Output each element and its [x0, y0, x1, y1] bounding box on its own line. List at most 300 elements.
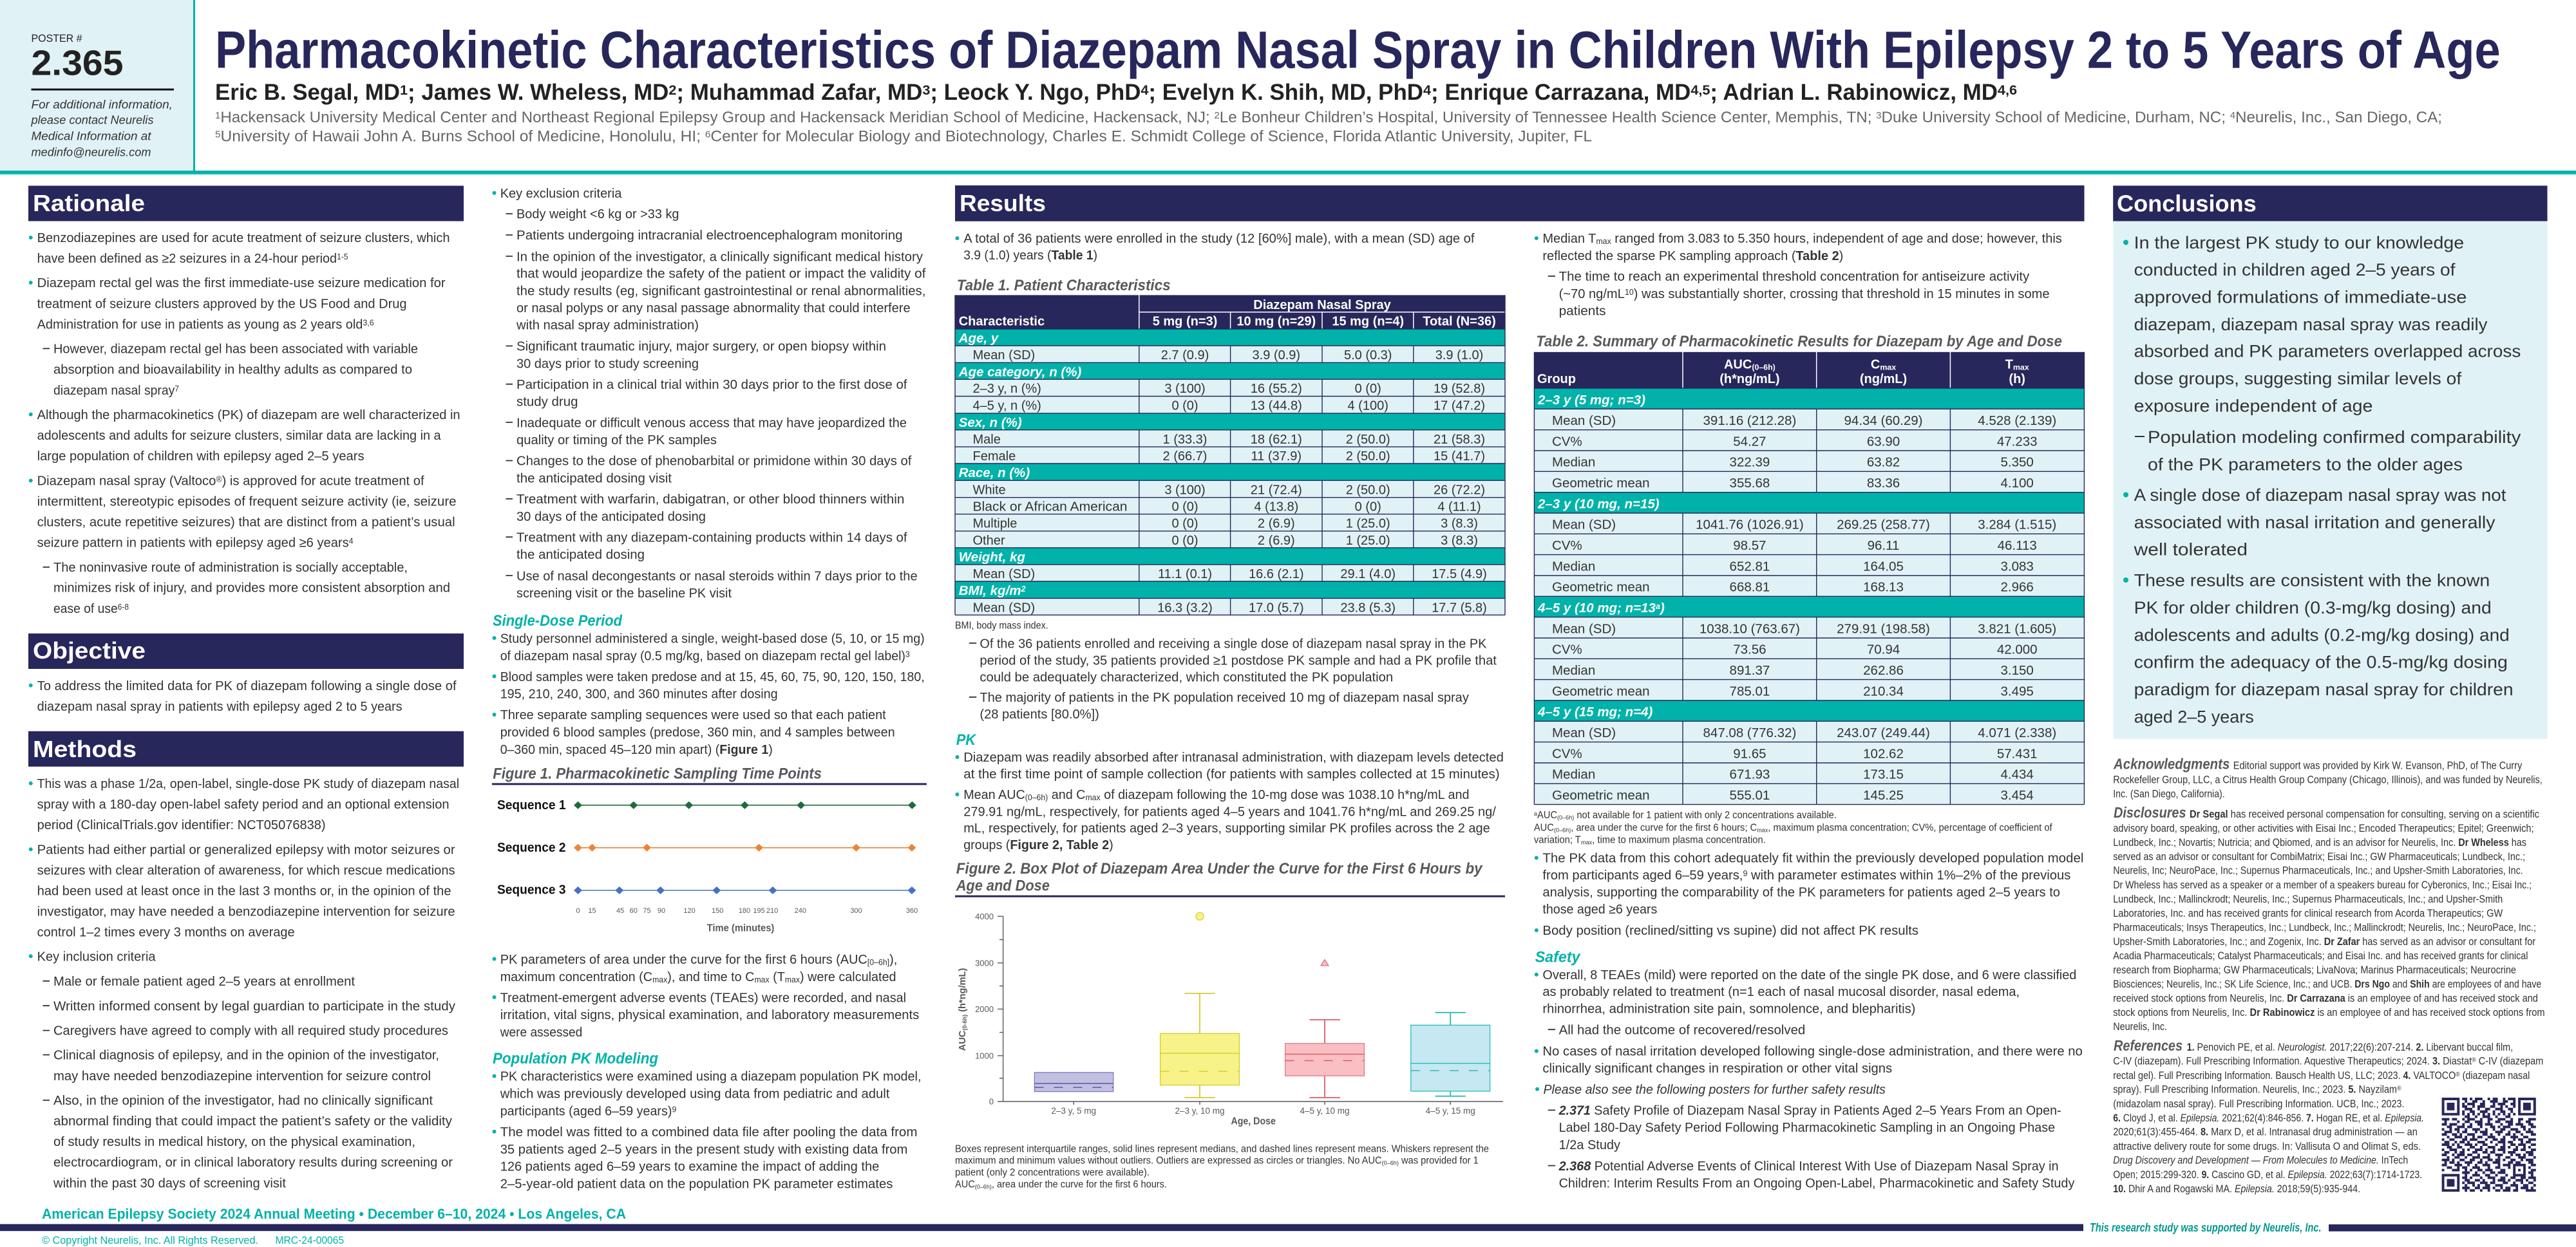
table 1 rows: 0 (0): [1171, 399, 1198, 413]
table 1 rows: 3 (8.3): [1441, 534, 1478, 548]
text block: safety bullets: Please also see the following posters for further safety results: [1543, 1082, 1886, 1097]
table 2 rows: 2.966: [2001, 580, 2034, 595]
text block: safety bullets: All had the outcome of recovered/resolved: [1559, 1022, 1805, 1037]
bullet: diazepam rectal gel: [29, 276, 446, 332]
table 2 rows: CV%: [1552, 434, 1582, 449]
table 2 rows: Mean (SD): [1552, 518, 1616, 532]
table 1 title: Table 1. Patient Characteristics: [957, 277, 1171, 294]
table 1 rows: 17 (47.2): [1434, 399, 1485, 413]
bullet: pharmacokinetics: Although the pharmacokinetics (PK) of diazepam are well characterized in: [37, 408, 460, 422]
bullet: objective text: To address the limited data for PK of diazepam following a single dose of: [37, 679, 457, 693]
bullet: key exclusion criteria: or nasal polyps or any nasal passage abnormality that could interfere: [516, 301, 911, 315]
icon: QR code: [2442, 1098, 2536, 1192]
bullet: largest PK study: absorbed and PK parameters overlapped across: [2134, 342, 2521, 361]
table 2 rows: 168.13: [1863, 580, 1904, 595]
table 1 rows: 1 (33.3): [1163, 433, 1207, 447]
table 2 footnotes: AUC(0–6h), area under the curve for the first 6 hours; Cmax, maximum plasma concentration; CV%, percentage of coefficient of: [1534, 823, 2052, 834]
bullet: key exclusion criteria: study drug: [516, 395, 578, 409]
text block: population PK bullets: 126 patients aged 6–59 years to examine the impact of adding the: [500, 1159, 879, 1174]
table 1 section labels: Weight, kg: [959, 550, 1025, 565]
figure 2 caption: maximum and minimum values without outliers. Outliers are expressed as circles or triangles. No AUC(0–6h) was provided for 1: [955, 1156, 1479, 1167]
bullet: results consistent: paradigm for diazepam nasal spray for children: [2134, 680, 2514, 699]
table 2 rows: Mean (SD): [1552, 726, 1616, 740]
references: Open; 2015:299-320. 9. Cascino GD, et al. Epilepsia. 2022;63(7):1714-1723.: [2113, 1169, 2422, 1181]
bullet: benzodiazepines: have been defined as ≥2 seizures in a 24-hour period1-5: [37, 251, 348, 266]
table 1 rows: 16 (55.2): [1251, 382, 1302, 396]
text block: safety bullets: No cases of nasal irritation developed following single-dose administration, and there were no: [1542, 1044, 2083, 1059]
bullet: key inclusion criteria: Caregivers have agreed to comply with all required study procedures: [53, 1024, 448, 1038]
y axis labels: 2000: [975, 1004, 994, 1014]
table 2 rows: 652.81: [1730, 559, 1770, 574]
table 2 title: Table 2. Summary of Pharmacokinetic Results for Diazepam by Age and Dose: [1536, 333, 2062, 350]
table 2 header: Tmax: [2005, 358, 2029, 372]
table 1 rows: 17.0 (5.7): [1249, 601, 1304, 615]
bullet: key inclusion criteria: [29, 949, 456, 1190]
table 2 rows: 63.82: [1867, 455, 1900, 470]
bullet: objective text: diazepam nasal spray in patients with epilepsy aged 2 to 5 years: [37, 699, 402, 714]
panel: conclusions: [2113, 185, 2548, 739]
table 2 rows: 70.94: [1867, 642, 1900, 657]
affiliations: 5University of Hawaii John A. Burns School of Medicine, Honolulu, HI; 6Center for Molecular Biology and Biotechnology, Charles E. Schmidt College of Science, Florida Atlantic University, Jupiter, FL: [215, 127, 1592, 145]
sub-bullets: PK population: could be adequately characterized, which constituted the PK population: [980, 670, 1393, 685]
text block: PK bullets: 279.91 ng/mL, respectively, for patients aged 4–5 years and 1041.76 h*ng/mL and 269.25 ng/: [963, 804, 1496, 819]
figure 2 title: Age and Dose: [956, 877, 1050, 895]
table 1 rows: 5.0 (0.3): [1344, 348, 1392, 362]
sub-bullet: noninvasive route: The noninvasive route of administration is socially acceptable,: [53, 560, 408, 575]
bullet: key exclusion criteria: Treatment with any diazepam-containing products within 14 days of: [516, 530, 907, 545]
subheading: single-dose period: Single-Dose Period: [493, 612, 623, 630]
text block: PK bullets: groups (Figure 2, Table 2): [963, 838, 1113, 852]
table 1 rows: 15 (41.7): [1434, 449, 1485, 464]
bullet: key exclusion criteria: the anticipated dosing: [516, 547, 645, 562]
bullet: diazepam rectal gel: Diazepam rectal gel was the first immediate-use seizure medication for: [37, 276, 446, 290]
y axis labels: 4000: [975, 912, 994, 921]
table 2 rows: Mean (SD): [1552, 621, 1616, 636]
x axis labels: 2–3 y, 10 mg: [1175, 1106, 1225, 1116]
bullet: key inclusion criteria: Key inclusion criteria: [37, 949, 156, 964]
table 2 footnotes: [1534, 810, 2052, 846]
table 2 rows: 3.821 (1.605): [1978, 621, 2056, 636]
table 2 section labels: 2–3 y (10 mg, n=15): [1537, 497, 1660, 511]
y axis labels: 1000: [975, 1051, 994, 1060]
bullet: results consistent: PK for older children (0.3-mg/kg dosing) and: [2134, 598, 2492, 617]
sub-bullet: variable absorption: [43, 341, 418, 398]
table 1 rows: 0 (0): [1171, 534, 1198, 548]
text block: PK model bullets: those aged ≥6 years: [1542, 902, 1657, 917]
heading: conclusions: Conclusions: [2117, 191, 2257, 217]
bullet: patients: had been used at least once in the last 3 months or, in the opinion of the: [37, 883, 451, 898]
table 1 rows: 2–3 y, n (%): [972, 382, 1041, 396]
heading: conclusions: [2113, 185, 2548, 221]
table 1 header: Total (N=36): [1423, 315, 1496, 329]
bullet: key exclusion criteria: 30 days prior to study screening: [516, 356, 699, 371]
disclosures: received stock options from Neurelis, Inc. Dr Carrazana is an employee of and has received stock and: [2113, 993, 2538, 1004]
bullet: key exclusion criteria: screening visit or the baseline PK visit: [516, 586, 732, 601]
affiliations: [215, 109, 2442, 145]
bullet: key inclusion criteria: of study results in medical history, on the physical examination,: [53, 1134, 415, 1149]
bullet: study design: This was a phase 1/2a, open-label, single-dose PK study of diazepam nasal: [37, 776, 459, 791]
footer: [0, 1206, 2576, 1246]
table 2 rows: CV%: [1552, 642, 1582, 657]
y axis title: AUC(0-6h) (h*ng/mL): [957, 968, 968, 1051]
sub-bullets: PK population: The majority of patients in the PK population received 10 mg of diazepam nasal spray: [980, 690, 1470, 705]
bullet: patients: [29, 842, 455, 940]
table 1 rows: 0 (0): [1355, 500, 1381, 514]
table 2 rows: 94.34 (60.29): [1844, 413, 1922, 428]
table 2 rows: 3.284 (1.515): [1978, 518, 2056, 532]
panel: rationale: [28, 185, 464, 616]
table 2 rows: 57.431: [1997, 746, 2038, 761]
text block: population PK bullets: 2–5-year-old patient data on the population PK parameter estimates: [500, 1176, 893, 1191]
table 1 rows: 2.7 (0.9): [1161, 348, 1209, 362]
bullet: enrollment: A total of 36 patients were enrolled in the study (12 [60%] male), with a mean (SD) age of: [963, 231, 1475, 246]
table 1 rows: 2 (50.0): [1346, 449, 1390, 464]
references: Drug Discovery and Development — From Molecules to Medicine. InTech: [2113, 1155, 2408, 1167]
references: rectal gel). Full Prescribing Information. Bausch Health US, LLC; 2023. 4. VALTOCO® (diazepam nasal: [2113, 1070, 2530, 1082]
table 1 rows: 2 (50.0): [1346, 433, 1390, 447]
table 1: patient characteristics: [955, 295, 1505, 615]
table 2 rows: 98.57: [1733, 538, 1766, 553]
references: 2020;61(3):455-464. 8. Marx D, et al. Intranasal drug administration — an: [2113, 1127, 2418, 1138]
table 1 rows: 11 (37.9): [1251, 449, 1302, 464]
x axis labels: 2–3 y, 5 mg: [1051, 1106, 1096, 1116]
sub-bullet: population modeling: of the PK parameters to the older ages: [2148, 455, 2463, 474]
references: References: [2114, 1037, 2183, 1054]
table 2 rows: CV%: [1552, 746, 1582, 761]
time axis labels: 360: [906, 907, 918, 915]
bullet: results consistent: These results are consistent with the known: [2134, 571, 2490, 590]
bullet: key exclusion criteria: In the opinion of the investigator, a clinically significant medical history: [516, 249, 923, 264]
bullet: key exclusion criteria: with nasal spray administration): [516, 318, 699, 332]
bullet: key exclusion criteria: Changes to the dose of phenobarbital or primidone within 30 days of: [516, 454, 912, 469]
panel: objective: [28, 633, 464, 714]
references: [2113, 1037, 2543, 1195]
bullet: key inclusion criteria: within the past 30 days of screening visit: [53, 1176, 286, 1190]
text block: single-dose bullets: Blood samples were taken predose and at 15, 45, 60, 75, 90, 120, 150, 180,: [500, 670, 925, 684]
time axis labels: 90: [658, 907, 665, 915]
heading: results: [955, 185, 2084, 221]
text block: PK parameters and TEAEs: PK parameters of area under the curve for the first 6 hours (AUC[0–6h]),: [500, 952, 897, 967]
table 2 rows: [1552, 413, 2056, 803]
table 1 rows: 11.1 (0.1): [1158, 567, 1212, 581]
sub-bullets: PK population: [969, 636, 1497, 722]
table 1 rows: 4 (11.1): [1437, 500, 1481, 514]
bullet: median Tmax: The time to reach an experimental threshold concentration for antiseizure activity: [1559, 269, 2030, 284]
references: 10. Dhir A and Rogawski MA. Epilepsia. 2018;59(5):935-944.: [2113, 1183, 2360, 1195]
disclosures: Disclosures: [2114, 804, 2186, 821]
table 1 header: Diazepam Nasal Spray: [1253, 298, 1392, 312]
table 1 rows: 2 (66.7): [1163, 449, 1207, 464]
y axis labels: [975, 912, 994, 1107]
table 1 rows: Black or African American: [972, 500, 1127, 514]
bullet: key exclusion criteria: that would jeopardize the safety of the patient or impact the validity of: [516, 267, 926, 281]
time axis labels: 75: [643, 907, 651, 915]
bullet: key exclusion criteria: 30 days of the anticipated dosing: [516, 509, 706, 524]
bullet: patients: investigator, may have needed a benzodiazepine intervention for seizure: [37, 904, 455, 919]
table 2 rows: 243.07 (249.44): [1837, 726, 1930, 740]
table 1 rows: 17.7 (5.8): [1432, 601, 1487, 615]
table 2 rows: Median: [1552, 455, 1595, 470]
text block: single-dose bullets: provided 6 blood samples (predose, 360 min, and 4 samples between: [500, 725, 895, 740]
bullet: benzodiazepines: Benzodiazepines are used for acute treatment of seizure clusters, which: [37, 230, 450, 245]
panel: methods, column 1: [28, 731, 464, 1190]
figure 2 caption: AUC(0–6h), area under the curve for the first 6 hours.: [955, 1179, 1167, 1190]
text block: safety bullets: clinically significant changes in respiration or other vital signs: [1542, 1061, 1892, 1076]
figure 2 title: [955, 860, 1505, 897]
text block: population PK bullets: [492, 1069, 921, 1191]
table 2 rows: 4.434: [2001, 767, 2034, 782]
bullet: key exclusion criteria: Significant traumatic injury, major surgery, or open biopsy within: [516, 339, 886, 354]
bullet: largest PK study: approved formulations of immediate-use: [2134, 287, 2467, 306]
bullet: median Tmax: Median Tmax ranged from 3.083 to 5.350 hours, independent of age and dose; however, this: [1542, 231, 2062, 246]
sub-bullet: population modeling: Population modeling confirmed comparability: [2148, 427, 2521, 447]
table 2 rows: Geometric mean: [1552, 476, 1650, 491]
table 2 rows: 173.15: [1863, 767, 1904, 782]
table 1 header: Characteristic: [959, 315, 1045, 329]
text block: population PK bullets: participants (aged 6–59 years)9: [500, 1104, 676, 1119]
heading: rationale: [28, 185, 464, 221]
support statement: This research study was supported by Neurelis, Inc.: [2090, 1221, 2321, 1234]
figure 1 title: Figure 1. Pharmacokinetic Sampling Time Points: [493, 765, 822, 783]
table 2 rows: 42.000: [1997, 642, 2038, 657]
table 1 rows: 3 (100): [1164, 382, 1206, 396]
table 2 rows: 668.81: [1730, 580, 1770, 595]
disclosures: Dr Segal has received personal compensation for consulting, serving on a scientific: [2190, 809, 2539, 820]
table 2 rows: 322.39: [1730, 455, 1770, 470]
table 2 section labels: 2–3 y (5 mg; n=3): [1537, 393, 1645, 408]
text block: PK bullets: [955, 750, 1504, 852]
table 1 rows: 4–5 y, n (%): [972, 399, 1041, 413]
axes: [998, 916, 1503, 1105]
table 2 section labels: 4–5 y (10 mg; n=13a): [1537, 601, 1665, 615]
table 2 rows: 91.65: [1733, 746, 1766, 761]
x axis title: Age, Dose: [1231, 1116, 1276, 1127]
table 1 rows: 3 (8.3): [1441, 517, 1478, 531]
sub-bullet: noninvasive route: minimizes risk of injury, and provides more consistent absorption and: [53, 581, 450, 595]
bullet: single dose tolerated: [2123, 485, 2506, 559]
bullet: key inclusion criteria: may have needed benzodiazepine intervention for seizure control: [53, 1069, 431, 1083]
table 2 rows: Geometric mean: [1552, 580, 1650, 595]
table 2 rows: 46.113: [1998, 538, 2037, 553]
bullet: results consistent: aged 2–5 years: [2134, 707, 2254, 726]
table 1 rows: 1 (25.0): [1346, 534, 1390, 548]
box: 2–3 y, 5 mg: [1034, 1073, 1113, 1092]
table 1 rows: 23.8 (5.3): [1340, 601, 1396, 615]
disclosures: [2113, 804, 2545, 1033]
bullet: largest PK study: exposure independent of age: [2134, 397, 2372, 416]
table 1 rows: 3 (100): [1164, 483, 1206, 497]
text block: population PK bullets: which was previously developed using data from pediatric and adult: [500, 1087, 890, 1102]
sequence 1: [497, 798, 916, 812]
table 2 rows: 145.25: [1863, 788, 1904, 803]
y axis labels: 0: [989, 1097, 994, 1107]
table 2: pharmacokinetic results: [1534, 352, 2084, 805]
table 1 section labels: [958, 331, 1081, 598]
table 2 rows: 3.150: [2001, 663, 2034, 678]
text block: PK parameters and TEAEs: maximum concentration (Cmax), and time to Cmax (Tmax) were calculated: [500, 970, 896, 984]
heading: objective: [28, 633, 464, 669]
bullet: key exclusion criteria: the study results (eg, significant gastrointestinal or renal abnormalities,: [516, 283, 925, 298]
disclosures: Biosciences; Neurelis, Inc.; SK Life Science, Inc.; and UCB. Drs Ngo and Shih are employees of and have: [2113, 979, 2541, 990]
text block: safety bullets: 2.371 Safety Profile of Diazepam Nasal Spray in Patients Aged 2–5 Years From an Open-: [1558, 1103, 2061, 1118]
table 1 rows: 21 (58.3): [1434, 433, 1485, 447]
table 2 rows: 47.233: [1997, 434, 2038, 449]
table 2 rows: Mean (SD): [1552, 413, 1616, 428]
bullet: median Tmax: [1535, 231, 2062, 319]
bullet: enrollment: [955, 231, 1475, 263]
figure 2 caption: patient (only 2 concentrations were available).: [955, 1167, 1150, 1178]
bullet: results consistent: confirm the adequacy of the 0.5-mg/kg dosing: [2134, 653, 2508, 672]
poster number panel: [0, 0, 195, 171]
sub-bullet: population modeling: [2135, 427, 2521, 474]
time axis labels: 60: [630, 907, 638, 915]
table 2 rows: 4.528 (2.139): [1978, 413, 2056, 428]
bullet: key exclusion criteria: the anticipated dosing visit: [516, 471, 672, 485]
time axis labels: 210: [766, 907, 778, 915]
table 2 rows: 5.350: [2001, 455, 2034, 470]
table 2 rows: 671.93: [1730, 767, 1770, 782]
time axis labels: 180: [739, 907, 750, 915]
table 1 rows: 2 (50.0): [1346, 483, 1390, 497]
table 1 rows: 0 (0): [1171, 500, 1198, 514]
contact text: Medical Information at: [31, 130, 152, 143]
table 2 header: (h): [2009, 372, 2025, 386]
acknowledgments: Inc. (San Diego, California).: [2113, 788, 2225, 800]
table 1 rows: White: [972, 483, 1006, 497]
bullet: study design: spray with a 180-day open-label safety period and an optional extension: [37, 797, 450, 812]
table 1 section labels: Sex, n (%): [959, 415, 1022, 430]
text block: PK parameters and TEAEs: Treatment-emergent adverse events (TEAEs) were recorded, and nasal: [500, 990, 906, 1005]
sub-bullets: PK population: (28 patients [80.0%]): [980, 707, 1099, 722]
disclosures: research from Biopharma; GW Pharmaceuticals; LivaNova; Marinus Pharmaceuticals; Neurocrine: [2113, 964, 2516, 976]
box: 2–3 y, 10 mg: [1160, 912, 1239, 1098]
bullet: patients: control 1–2 times every 3 months on average: [37, 924, 295, 940]
text block: PK model bullets: [1535, 851, 2083, 938]
table 1 rows: 13 (44.8): [1251, 399, 1302, 413]
table 1 rows: [972, 348, 1487, 615]
time axis labels: 300: [850, 907, 862, 915]
text block: safety bullets: Children: Interim Results From an Ongoing Open-Label, Pharmacokinetic and Safety Study: [1559, 1176, 2075, 1190]
table 2 rows: 164.05: [1863, 559, 1904, 574]
text block: PK model bullets: from participants aged 6–59 years,9 with parameter estimates within 1%–2% of the previous: [1542, 868, 2070, 883]
disclosures: Neurelis, Inc.: [2113, 1021, 2167, 1033]
table 1 rows: Male: [972, 433, 1001, 447]
table 2 header: Group: [1537, 372, 1576, 386]
table 2 rows: 279.91 (198.58): [1837, 621, 1930, 636]
bullet: nasal spray approval: clusters, acute repetitive seizures) that are distinct from a patient’s usual: [37, 514, 455, 529]
bullet: benzodiazepines: [29, 230, 450, 266]
chart: sampling time points: [497, 798, 918, 934]
table 1 section labels: BMI, kg/m2: [959, 583, 1026, 598]
sequence 3: Sequence 3: [497, 883, 565, 897]
sub-bullet: noninvasive route: ease of use6-8: [53, 601, 129, 616]
bullet: key inclusion criteria: Male or female patient aged 2–5 years at enrollment: [53, 974, 355, 989]
text block: PK parameters and TEAEs: irritation, vital signs, physical examination, and laboratory measurements: [500, 1008, 919, 1022]
bullet: pharmacokinetics: adolescents and adults for seizure clusters, similar data are lacking in a: [37, 428, 441, 443]
x axis labels: 4–5 y, 15 mg: [1426, 1106, 1475, 1116]
bullet: key inclusion criteria: Written informed consent by legal guardian to participate in the study: [53, 999, 456, 1013]
table 2 rows: 54.27: [1733, 434, 1766, 449]
table 1 footnote: BMI, body mass index.: [955, 621, 1048, 632]
table 2 rows: 785.01: [1730, 684, 1770, 699]
panel: results: [955, 185, 2084, 1190]
table 2 header: (h*ng/mL): [1719, 372, 1780, 386]
bullet: key exclusion criteria: Body weight <6 kg or >33 kg: [516, 207, 679, 221]
bullet: results consistent: adolescents and adults (0.2-mg/kg dosing) and: [2134, 626, 2510, 645]
table 1 rows: 29.1 (4.0): [1340, 567, 1396, 581]
table 2 rows: Geometric mean: [1552, 788, 1650, 803]
table 1 section labels: Race, n (%): [959, 465, 1030, 480]
x axis labels: 4–5 y, 10 mg: [1300, 1106, 1350, 1116]
sub-bullets: PK population: period of the study, 35 patients provided ≥1 postdose PK sample and had a PK profile that: [980, 653, 1497, 668]
table 2 header: AUC(0–6h): [1724, 358, 1776, 372]
table 2 rows: 891.37: [1730, 663, 1770, 678]
bullet: median Tmax: patients: [1559, 304, 1606, 319]
text block: PK parameters and TEAEs: [492, 952, 919, 1040]
table 1 rows: 1 (25.0): [1346, 517, 1390, 531]
table 2 rows: Median: [1552, 559, 1595, 574]
disclosures: Acadia Pharmaceuticals; Catalyst Pharmaceuticals; and Eisai Inc. and has received grants for clinical: [2113, 950, 2528, 962]
heading: results: Results: [960, 190, 1046, 216]
text block: single-dose bullets: Three separate sampling sequences were used so that each patient: [500, 708, 886, 722]
bullet: key exclusion criteria: Use of nasal decongestants or nasal steroids within 7 days prior to the: [516, 568, 918, 583]
y axis labels: 3000: [975, 958, 994, 968]
contact text: please contact Neurelis: [30, 114, 153, 127]
bullet: enrollment: 3.9 (1.0) years (Table 1): [963, 248, 1097, 263]
text block: safety bullets: Label 180-Day Safety Period Following Pharmacokinetic Sampling in an Ongoing Phase: [1559, 1120, 2055, 1135]
text block: safety bullets: Overall, 8 TEAEs (mild) were reported on the date of the single PK dose, and 6 were classified: [1542, 968, 2076, 982]
bullet: largest PK study: conducted in children aged 2–5 years of: [2134, 260, 2456, 279]
figure 2 caption: [955, 1143, 1489, 1190]
table 2 rows: 391.16 (212.28): [1703, 413, 1796, 428]
table 1 rows: 2 (6.9): [1258, 534, 1295, 548]
table 1 header: 15 mg (n=4): [1332, 315, 1404, 329]
text block: PK bullets: Mean AUC(0–6h) and Cmax of diazepam following the 10-mg dose was 1038.10 h*ng/mL and: [963, 787, 1470, 803]
text block: safety bullets: rhinorrhea, administration site pain, somnolence, and blepharitis): [1542, 1002, 1915, 1017]
text block: population PK bullets: The model was fitted to a combined data file after pooling the data from: [500, 1125, 917, 1139]
bullet: nasal spray approval: seizure pattern in patients with epilepsy aged ≥6 years4: [37, 536, 354, 550]
table 1 rows: 16.6 (2.1): [1249, 567, 1304, 581]
sub-bullets: PK population: Of the 36 patients enrolled and receiving a single dose of diazepam nasal spray in the PK: [980, 636, 1487, 651]
text block: PK bullets: at the first time point of sample collection (for patients with samples collected at 15 minutes): [963, 767, 1500, 782]
table 1 section labels: Age category, n (%): [958, 364, 1081, 379]
affiliations: 1Hackensack University Medical Center and Northeast Regional Epilepsy Group and Hackensack Meridian School of Medicine, Hackensack, NJ; 2Le Bonheur Children’s Hospital, University of Tennessee Health Science Center, Memphis, TN; 3Duke University School of Medicine, Durham, NC; 4Neurelis, Inc., San Diego, CA;: [215, 109, 2442, 126]
references: spray). Full Prescribing Information. Neurelis, Inc.; 2023. 5. Nayzilam®: [2113, 1084, 2401, 1096]
time axis labels: 150: [712, 907, 723, 915]
time axis labels: 120: [683, 907, 696, 915]
bullet: key inclusion criteria: electrocardiogram, or in clinical laboratory results during screening or: [53, 1155, 453, 1170]
bullet: results consistent: [2123, 571, 2514, 726]
bullet: key inclusion criteria: Also, in the opinion of the investigator, had no clinically significant: [53, 1093, 433, 1108]
table 1 rows: Female: [972, 449, 1016, 464]
table 1 rows: 2 (6.9): [1258, 517, 1295, 531]
contact text: [30, 98, 173, 158]
table 1 rows: 26 (72.2): [1434, 483, 1485, 497]
text block: PK bullets: Diazepam was readily absorbed after intranasal administration, with diazepam levels detected: [963, 750, 1504, 765]
table 2 rows: Median: [1552, 767, 1595, 782]
acknowledgments: [2113, 756, 2543, 800]
time axis title: Time (minutes): [707, 923, 774, 934]
text block: safety bullets: 1/2a Study: [1559, 1138, 1621, 1152]
heading: methods: Methods: [33, 736, 137, 762]
table 2 rows: CV%: [1552, 538, 1582, 553]
document code: MRC-24-00065: [276, 1234, 344, 1246]
table 2 rows: 96.11: [1868, 538, 1899, 553]
references: 1. Penovich PE, et al. Neurologist. 2017;22(6):207-214. 2. Libervant buccal film,: [2187, 1042, 2513, 1053]
figure 2 caption: Boxes represent interquartile ranges, solid lines represent medians, and dashed lines represent means. Whiskers represent the: [955, 1143, 1489, 1154]
text block: single-dose bullets: Study personnel administered a single, weight-based dose (5, 10, or 15 mg): [500, 631, 925, 646]
table 1 header: 10 mg (n=29): [1236, 315, 1316, 329]
